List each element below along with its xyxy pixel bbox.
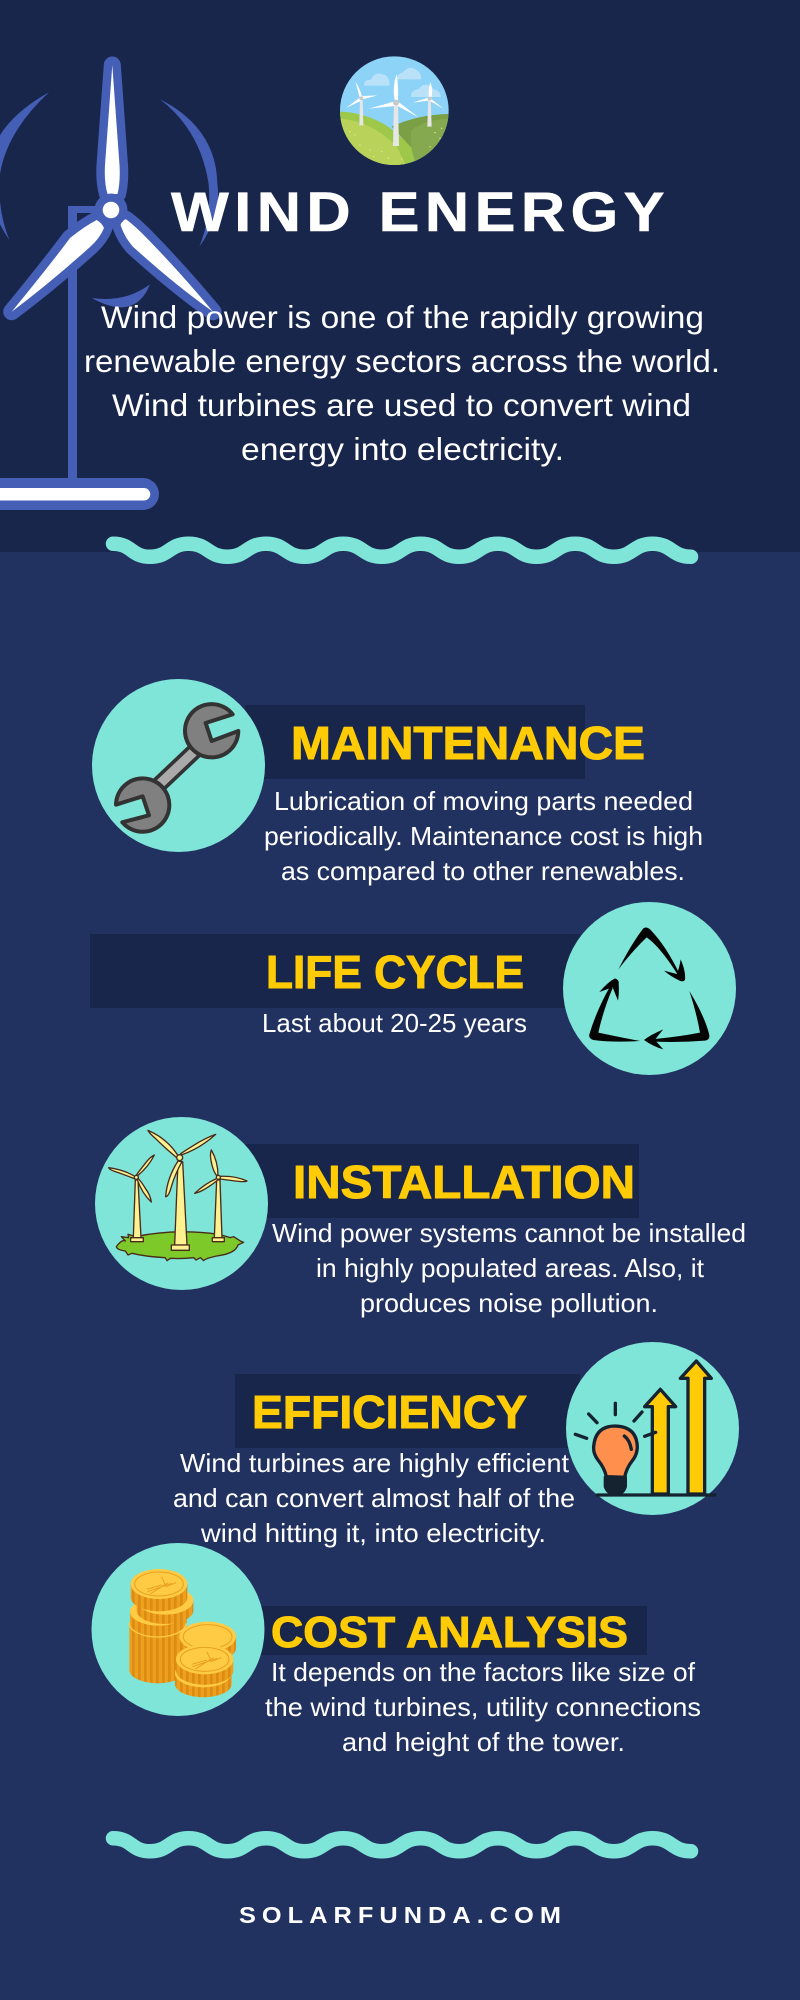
intro text [84, 299, 720, 467]
icon: stacks of coins [129, 1569, 236, 1697]
description [173, 1448, 575, 1548]
heading: COST ANALYSIS [271, 1608, 628, 1657]
description: the wind turbines, utility connections [265, 1692, 701, 1722]
footer website: SOLARFUNDA.COM [239, 1902, 567, 1928]
panel: cost analysis [92, 1543, 701, 1757]
intro text: Wind turbines are used to convert wind [112, 387, 691, 423]
description: produces noise pollution. [360, 1288, 658, 1318]
description: Lubrication of moving parts needed [274, 786, 693, 816]
description: Last about 20-25 years [262, 1008, 527, 1038]
panel: installation [95, 1117, 746, 1318]
icon: recycle arrows [589, 927, 709, 1049]
description [272, 1218, 746, 1318]
icon: wind farm [109, 1130, 247, 1261]
description: and height of the tower. [342, 1727, 625, 1757]
description [264, 786, 703, 886]
description [265, 1657, 701, 1757]
heading: INSTALLATION [293, 1156, 635, 1208]
description: wind hitting it, into electricity. [200, 1518, 546, 1548]
description: Wind turbines are highly efficient [180, 1448, 570, 1478]
intro text: Wind power is one of the rapidly growing [101, 299, 704, 335]
description: It depends on the factors like size of [271, 1657, 696, 1687]
description: periodically. Maintenance cost is high [264, 821, 703, 851]
panel: life cycle [90, 902, 736, 1075]
description: Wind power systems cannot be installed [272, 1218, 746, 1248]
icon: round landscape with turbines [340, 56, 449, 165]
wave divider: top [113, 544, 691, 557]
intro text: renewable energy sectors across the world. [84, 343, 720, 379]
heading: MAINTENANCE [291, 717, 645, 769]
title: WIND ENERGY [171, 180, 670, 243]
wave divider: bottom [113, 1838, 691, 1851]
description: and can convert almost half of the [173, 1483, 575, 1513]
heading: LIFE CYCLE [266, 946, 524, 998]
description: in highly populated areas. Also, it [316, 1253, 705, 1283]
description: as compared to other renewables. [281, 856, 685, 886]
icon: wrench [116, 704, 238, 832]
intro text: energy into electricity. [241, 431, 564, 467]
panel: header [0, 0, 800, 552]
panel: maintenance [92, 679, 703, 886]
heading: EFFICIENCY [252, 1386, 527, 1438]
icon: light bulb and rising arrows [575, 1361, 715, 1495]
panel: efficiency [173, 1342, 739, 1548]
icon: large wind turbine outline [0, 65, 218, 510]
